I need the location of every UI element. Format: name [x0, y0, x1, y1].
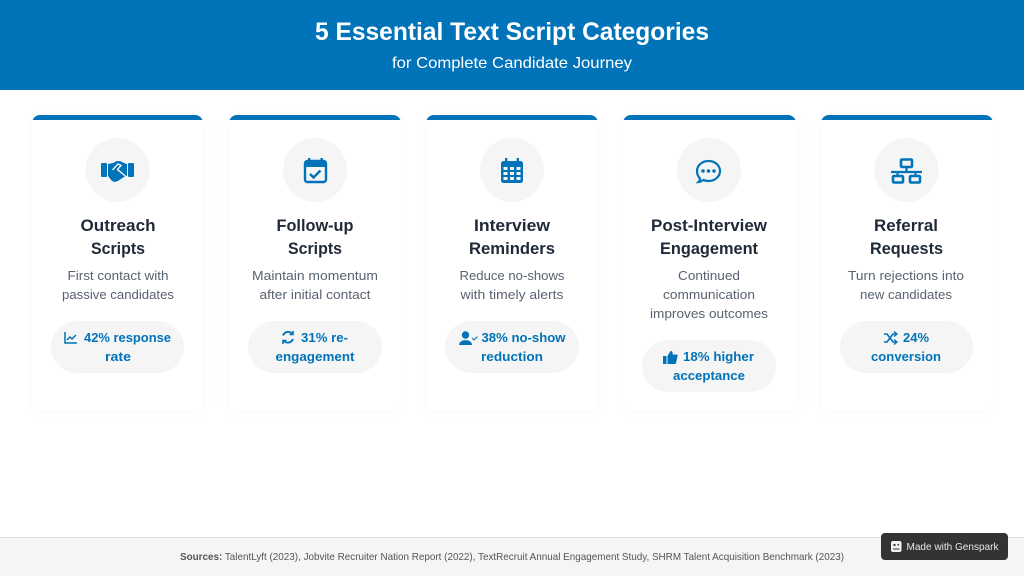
icon: shuffle [884, 332, 897, 344]
icon: line chart [65, 332, 77, 343]
heading: Referral [874, 217, 938, 235]
stat badge: acceptance [673, 368, 745, 383]
sources text: Sources: TalentLyft (2023), Jobvite Recruiter Nation Report (2022), TextRecruit Annual Engagement Study, SHRM Talent Acquisition Benchmark (2023) [180, 551, 844, 563]
stat badge: 42% response [84, 330, 171, 345]
description [650, 268, 769, 321]
heading: Engagement [660, 240, 758, 258]
heading [469, 217, 555, 258]
heading: Requests [870, 240, 943, 258]
icon: calendar [501, 158, 523, 183]
stat badge: 18% higher [683, 349, 754, 364]
description: passive candidates [62, 287, 174, 302]
description: Turn rejections into [848, 268, 964, 283]
description: Reduce no-shows [460, 268, 565, 283]
stat badge: 24% [903, 330, 929, 345]
stat badge: 31% re- [301, 330, 348, 345]
stat badge [642, 340, 776, 392]
heading: Scripts [288, 240, 342, 258]
description: Continued [678, 268, 740, 283]
description [459, 268, 565, 302]
heading [870, 217, 943, 258]
heading [276, 217, 354, 258]
stat badge: rate [105, 349, 131, 364]
description [62, 268, 174, 302]
description: after initial contact [260, 287, 371, 302]
stat badge [248, 321, 382, 373]
panel: post-interview engagement [623, 115, 796, 410]
description: communication [663, 287, 755, 302]
stat badge: 38% no-show [482, 330, 566, 345]
title: 5 Essential Text Script Categories [315, 18, 709, 46]
stat badge: reduction [481, 349, 543, 364]
panel: outreach scripts [32, 115, 202, 373]
icon: network [891, 160, 922, 182]
icon: thumbs up [663, 351, 678, 364]
icon: genspark logo [891, 541, 902, 552]
icon: handshake [101, 161, 134, 182]
made with genspark badge [881, 533, 1008, 560]
stat badge: engagement [276, 349, 355, 364]
description: First contact with [68, 268, 168, 283]
panel: interview reminders [426, 115, 598, 373]
stat badge: conversion [871, 349, 941, 364]
icon: speech bubble [697, 161, 720, 182]
description [252, 268, 378, 302]
heading: Outreach [80, 217, 156, 235]
icon: refresh [283, 331, 293, 344]
heading [80, 217, 156, 258]
icon: user check [459, 331, 478, 345]
heading: Post-Interview [651, 217, 767, 235]
heading: Scripts [91, 240, 145, 258]
heading [651, 217, 767, 258]
subtitle: for Complete Candidate Journey [392, 55, 632, 72]
made with genspark badge: Made with Genspark [906, 541, 999, 553]
stat badge [445, 321, 579, 373]
icon: calendar check [305, 158, 326, 182]
stat badge [51, 321, 184, 373]
description: Maintain momentum [252, 268, 378, 283]
description: improves outcomes [650, 306, 769, 321]
panel: referral requests [822, 115, 992, 373]
footer bar [0, 537, 1024, 576]
stat badge [840, 321, 973, 373]
heading: Reminders [469, 240, 555, 258]
description: new candidates [860, 287, 953, 302]
header banner [0, 0, 1024, 90]
description [848, 268, 964, 302]
heading: Follow-up [276, 217, 354, 235]
description: with timely alerts [459, 287, 564, 302]
panel: follow-up scripts [230, 115, 400, 373]
heading: Interview [474, 217, 550, 235]
